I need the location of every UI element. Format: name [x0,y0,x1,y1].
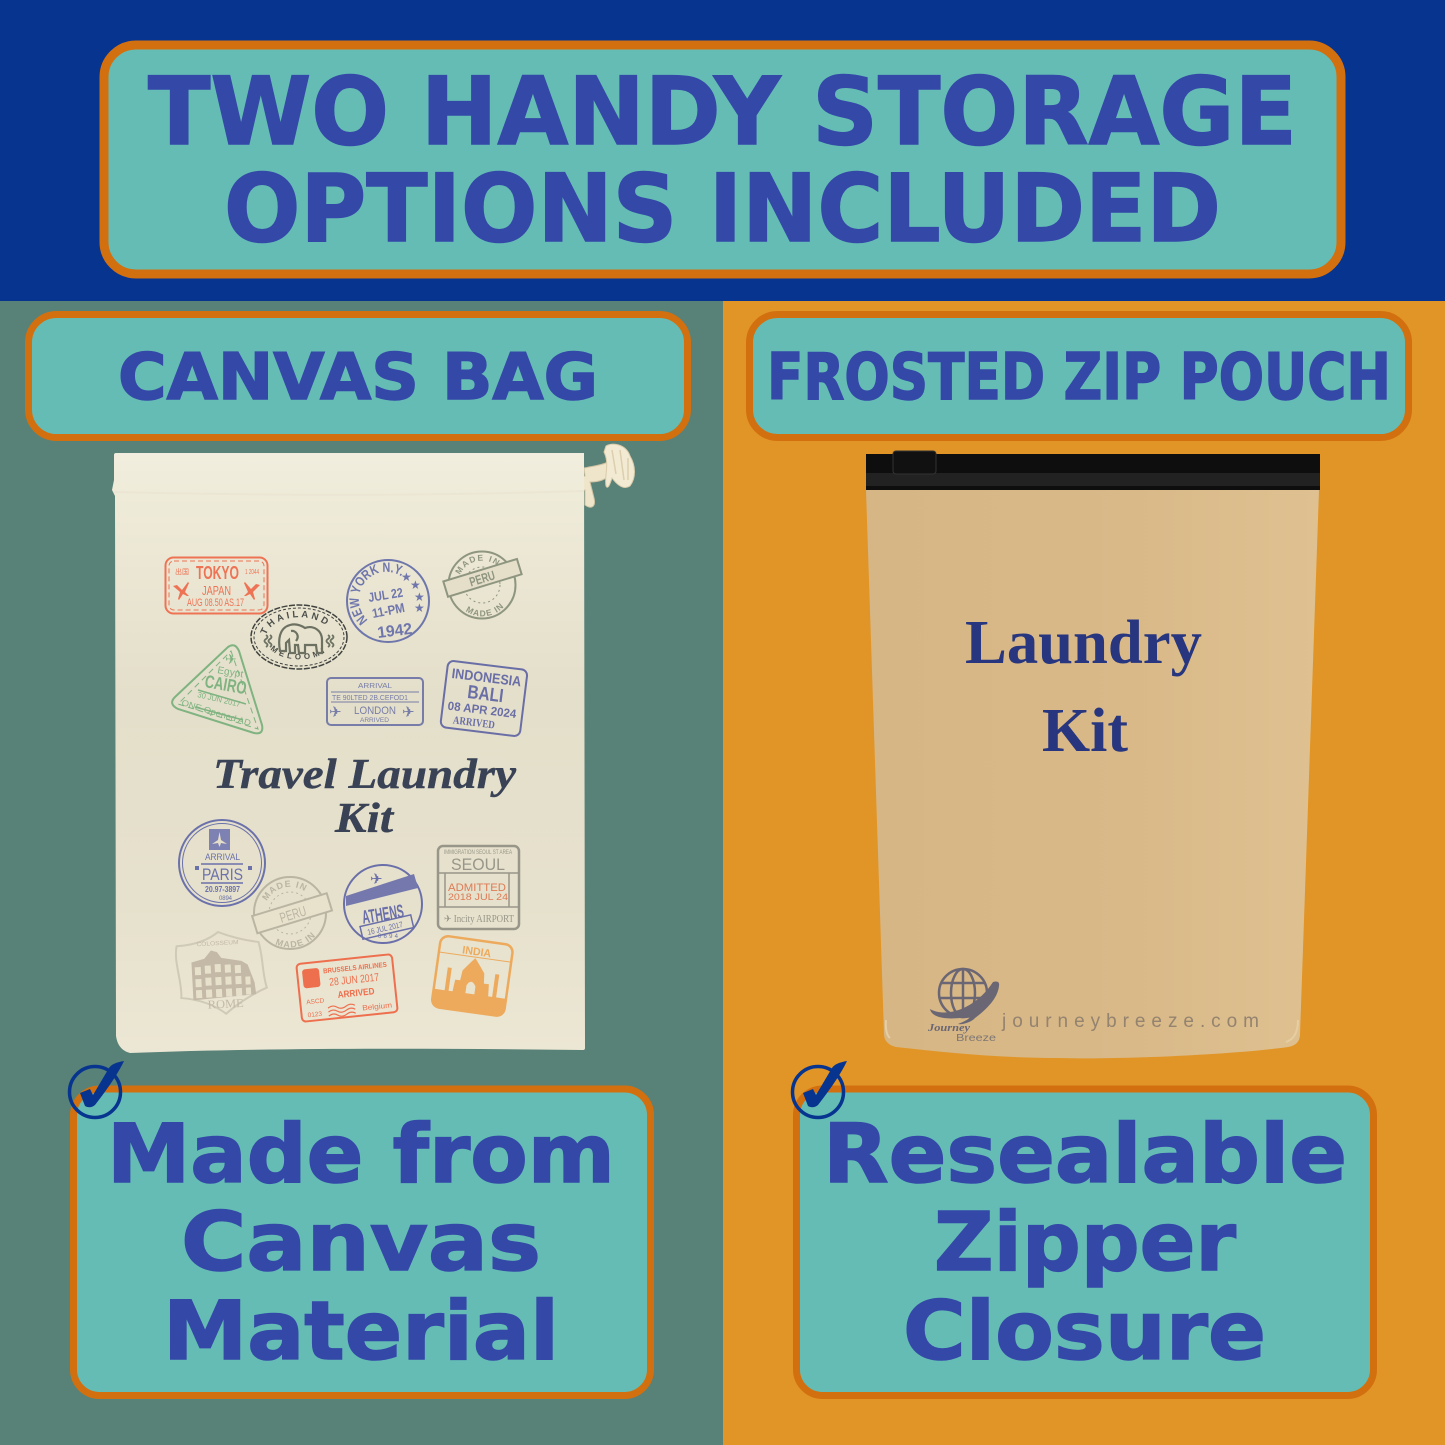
stamp: Peru olive: MADE IN [455,554,500,574]
stamp: Peru tan: MADE IN [276,932,315,948]
logo: Journey Breeze: Journey [927,1023,971,1034]
stamp: Brussels [296,954,398,1022]
stamp: Indonesia Bali [440,660,528,737]
stamp: Tokyo: TOKYO [196,563,239,583]
stamp: Indonesia Bali: INDONESIA [451,665,522,689]
callout: made from canvas material: Material [163,1285,559,1379]
stamp: London: ✈ [402,704,415,721]
pouch label [965,609,1202,765]
stamp: Tokyo: 1 2044 [245,569,259,576]
stamp: Paris: ARRIVAL [205,852,240,863]
callout: made from canvas material: Canvas [181,1196,541,1290]
stamp: Seoul: 2018 JUL 24 [448,892,508,903]
icon: check mark right [792,1061,847,1118]
stamp: Peru tan: PERU [278,903,308,926]
stamp: London: LONDON [354,705,396,717]
stamp: Cairo: Egypt [216,665,244,681]
stamp: Cairo: 30 JUN 2017 [197,690,242,709]
bag title [213,752,516,842]
stamp: Tokyo: JAPAN [202,583,231,598]
stamp: India: INDIA [462,944,492,960]
stamp: Tokyo: 出国 [175,567,189,576]
stamp: New York: ★ [414,601,425,615]
title [148,58,1297,264]
stamp: Paris: 0894 [219,896,233,902]
stamp: Paris: PARIS [202,865,243,884]
stamp: London: ✈ [329,704,342,721]
stamp: Seoul: ADMITTED [448,882,506,894]
stamp: Tokyo: AUG 08.50 AS.17 [187,597,244,609]
panel: canvas bag [0,301,723,1445]
callout: made from canvas material: Made from [107,1108,615,1202]
stamp: Athens [344,865,422,943]
stamp: Tokyo [166,558,268,614]
title: TWO HANDY STORAGE [148,58,1297,167]
stamp: Thailand: THAILAND [260,610,328,634]
stamp: Brussels: 28 JUN 2017 [329,972,380,989]
stamp: Peru olive: MADE IN [466,603,504,616]
pouch label: Kit [1042,697,1128,765]
stamp: Cairo: CAIRO [203,671,248,698]
stamp: Seoul [438,846,519,929]
website: journeybreeze.com [1001,1011,1259,1032]
stamp: New York: 11-PM [371,600,406,621]
stamp: Cairo [172,645,262,733]
callout: resealable zipper closure: Closure [903,1285,1266,1379]
callout: resealable zipper closure: Zipper [934,1196,1236,1290]
stamp: London: ARRIVED [360,717,389,724]
zipper [866,451,1320,490]
stamp: Rome: ROME [207,996,244,1012]
stamp: Athens: ATHENS [361,901,405,929]
stamp: Paris: 20.97-3897 [205,885,240,894]
stamp: Brussels: BRUSSELS AIRLINES [323,962,387,975]
drawstring knot [568,444,634,507]
logo: Journey Breeze: Breeze [956,1033,997,1044]
stamp: Paris [179,820,265,906]
stamp: Brussels: ASCD [306,997,325,1006]
header band [0,0,1445,301]
title box [104,45,1341,274]
stamp: New York: 1942 [376,621,413,642]
stamp: Peru tan: MADE IN [262,880,307,900]
callout: made from canvas material [74,1089,650,1396]
stamp: New York: JUL 22 [367,585,404,605]
stamp: Cairo: ✈ [225,651,237,667]
stamp: Rome [175,930,268,1016]
stamp: Rome: COLOSSEUM [196,940,239,948]
callout: resealable zipper closure [796,1089,1374,1396]
stamp: Athens: 0 6 9 4 [378,934,399,940]
stamp: New York [346,559,430,643]
bag title: Kit [334,796,394,842]
heading: frosted zip pouch [750,314,1408,438]
heading: canvas bag [28,314,688,438]
stamp: London [327,678,423,725]
stamp: Cairo: ONE Opened AD [180,697,252,728]
canvas bag illustration [112,453,585,1053]
stamp: New York: ★ [401,570,412,584]
stamp: Peru olive [442,550,523,620]
stamp: Peru olive: PERU [468,568,497,589]
bag title: Travel Laundry [213,752,516,798]
stamp: Brussels: Belgium [362,1000,392,1012]
stamp: New York: ★ [410,578,421,592]
callout: resealable zipper closure: Resealable [823,1108,1347,1202]
stamp: Athens: 16 JUL 2017 [367,920,404,937]
stamp: Indonesia Bali: BALI [466,682,505,707]
stamp: Indonesia Bali: ARRIVED [452,714,495,731]
logo: Journey Breeze [927,969,999,1044]
stamp: Indonesia Bali: 08 APR 2024 [447,699,517,721]
stamp: India [431,935,514,1017]
icon: check mark left [70,1061,124,1118]
stamp: Seoul: SEOUL [451,855,505,874]
stamp: Peru tan [251,876,334,950]
frosted pouch illustration [866,451,1320,1058]
stamp: New York: ★ [414,590,425,604]
stamp: Thailand: MELOOMI [270,646,324,660]
stamp: New York: NEW YORK N.Y. [349,562,403,626]
stamp: Brussels: 0123 [307,1011,323,1019]
stamp: Athens: ✈ [370,871,383,888]
stamp: Thailand [250,604,348,670]
pouch label: Laundry [965,609,1202,677]
stamp: Seoul: IMMIGRATION SEOUL ST AREA [444,850,512,856]
panel: frosted zip pouch [723,301,1445,1445]
heading: canvas bag: CANVAS BAG [118,341,598,415]
stamp: London: ARRIVAL [358,683,392,690]
stamp: London: TE 90LTED 2B.CEFOD1 [332,695,408,702]
stamp: Seoul: ✈ Incity AIRPORT [444,914,514,925]
stamp: Brussels: ARRIVED [337,986,375,1001]
title: OPTIONS INCLUDED [224,155,1221,264]
